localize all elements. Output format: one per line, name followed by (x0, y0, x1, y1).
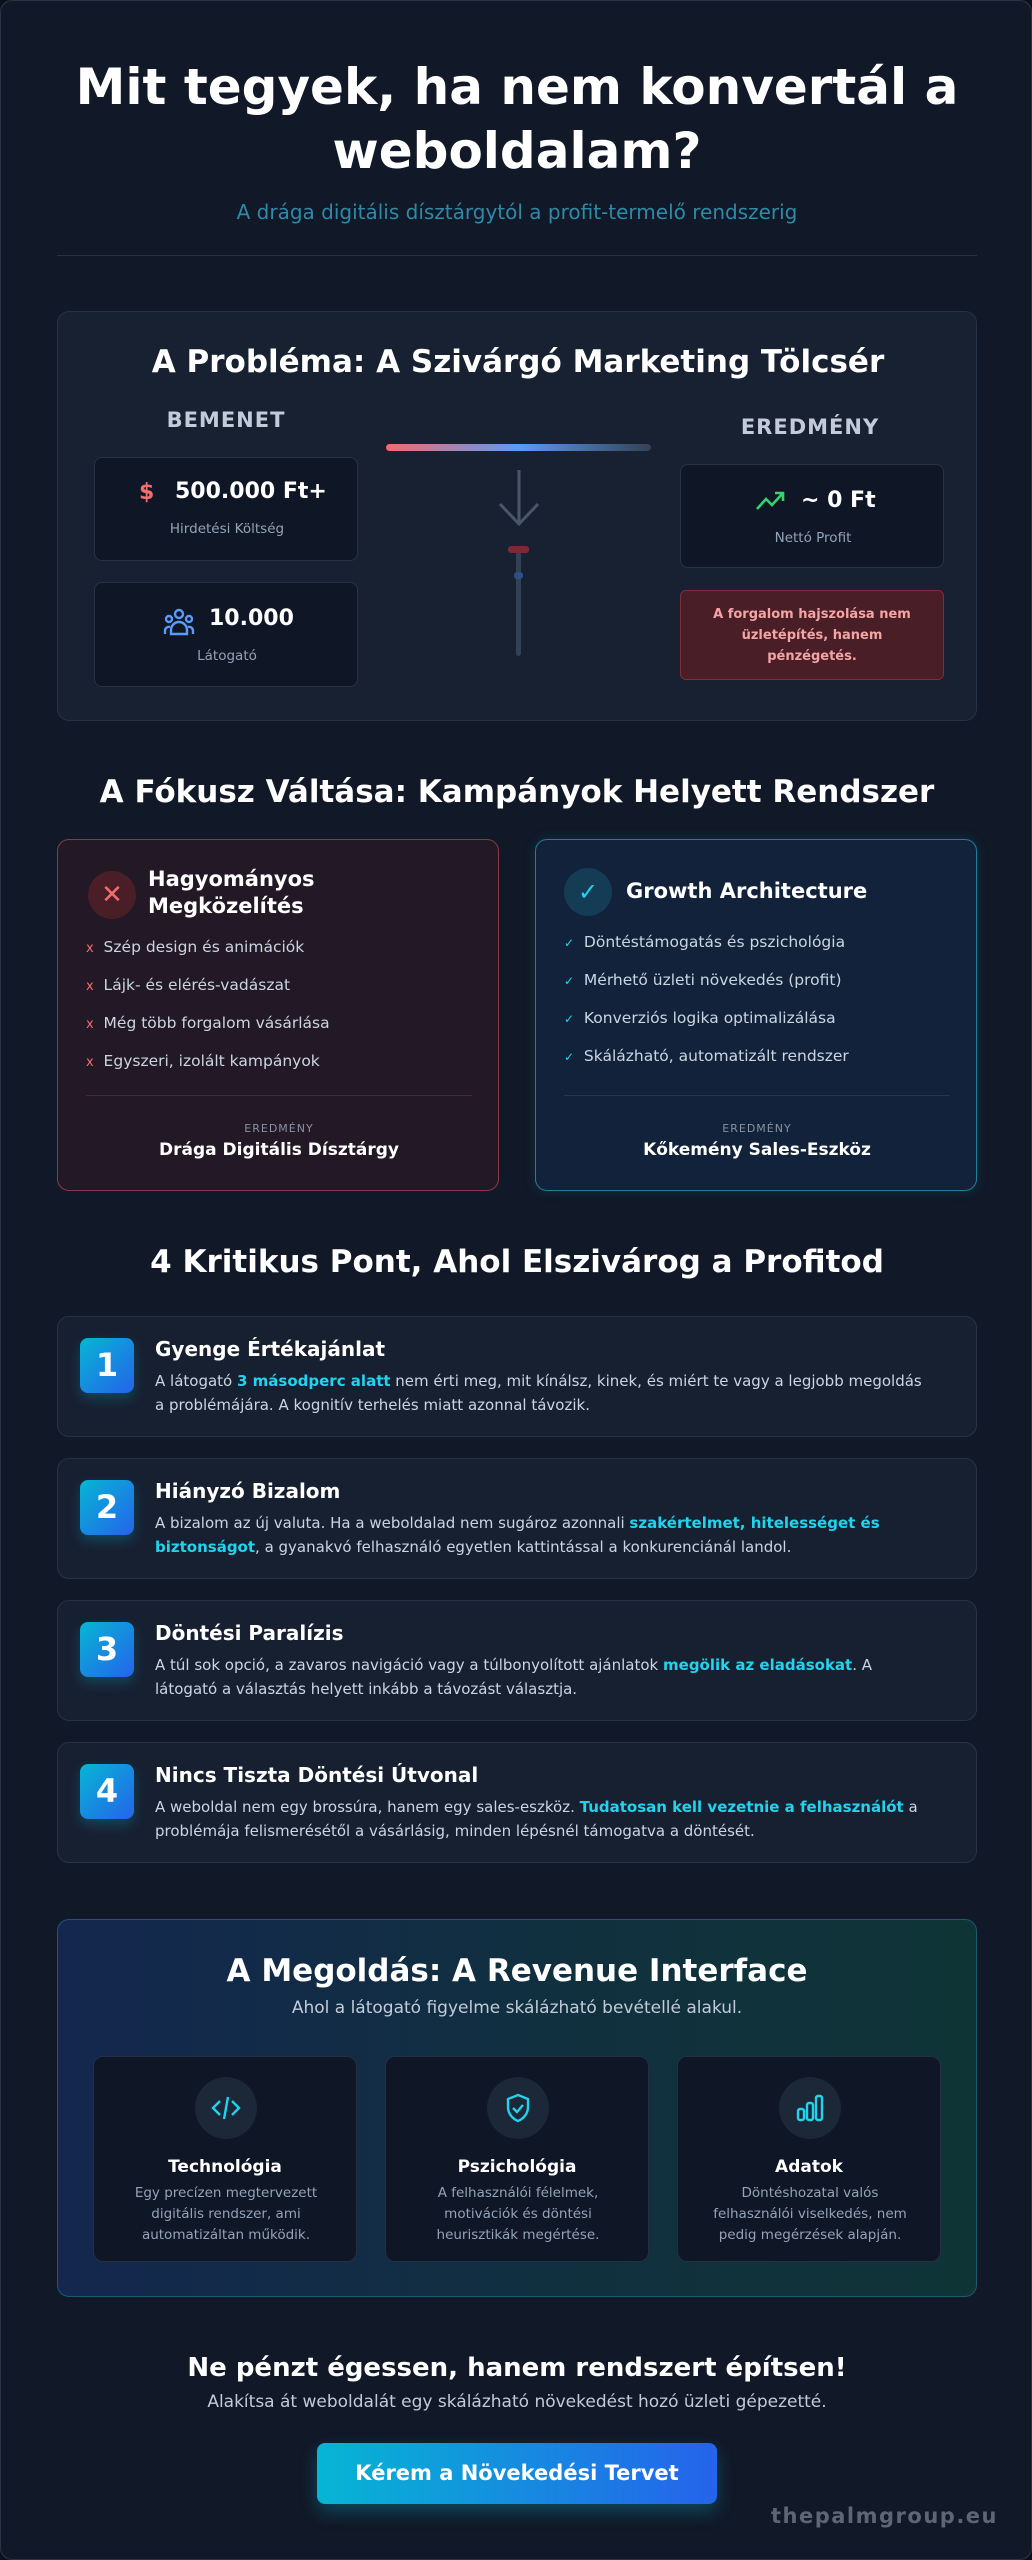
button (317, 2443, 717, 2504)
icon: shield (487, 2077, 549, 2139)
cta text: Alakítsa át weboldalát egy skálázható növekedést hozó üzleti gépezetté. (207, 2392, 827, 2412)
card: technology (93, 2056, 357, 2262)
subtitle: A drága digitális dísztárgytól a profit-termelő rendszerig (237, 200, 797, 224)
card: net profit (680, 464, 944, 568)
badge 1 (80, 1338, 134, 1393)
card: ad cost: 500.000 Ft+ (175, 479, 327, 504)
badge 2: 2 (96, 1488, 118, 1526)
icon: bar chart (779, 2077, 841, 2139)
point 3 (57, 1600, 977, 1721)
panel: traditional approach: Megközelítés (148, 894, 304, 918)
icon: users (164, 608, 194, 636)
badge 4: 4 (96, 1772, 118, 1810)
callout: warning (680, 590, 944, 680)
funnel leak graphic (386, 444, 651, 656)
card: visitors (94, 582, 358, 687)
watermark: thepalmgroup.eu (771, 2504, 998, 2528)
result: growth: Kőkemény Sales-Eszköz (643, 1140, 871, 1160)
heading: 4 critical points: 4 Kritikus Pont, Ahol Elszivárog a Profitod (150, 1244, 884, 1280)
icon: x (88, 871, 136, 919)
point 1: A látogató 3 másodperc alatt nem érti meg, mit kínálsz, kinek, és miért te vagy a legjobb megoldás (155, 1372, 922, 1390)
panel: traditional approach: x Szép design és animációk (86, 938, 304, 956)
panel: growth architecture: ✓ Konverziós logika optimalizálása (564, 1009, 836, 1027)
label: bemenet: BEMENET (167, 408, 285, 432)
panel: solution (57, 1919, 977, 2297)
badge 2 (80, 1480, 134, 1535)
callout: warning: üzletépítés, hanem (742, 628, 882, 643)
point 1 (57, 1316, 977, 1437)
panel: growth architecture (535, 839, 977, 1191)
icon: money: $ (139, 480, 154, 505)
panel: growth architecture: Growth Architecture (626, 879, 867, 903)
panel: growth architecture: ✓ Döntéstámogatás és pszichológia (564, 933, 845, 951)
panel: growth architecture: ✓ Skálázható, automatizált rendszer (564, 1047, 849, 1065)
icon: check: ✓ (578, 878, 598, 906)
cta heading: Ne pénzt égessen, hanem rendszert építsen! (187, 2353, 847, 2383)
callout: warning: A forgalom hajszolása nem (713, 607, 911, 622)
heading: problem: A Probléma: A Szivárgó Marketing Tölcsér (152, 344, 884, 380)
panel: traditional approach (57, 839, 499, 1191)
point 2 (57, 1458, 977, 1579)
card: technology: Technológia (168, 2157, 282, 2177)
icon: check (564, 868, 612, 916)
button: Kérem a Növekedési Tervet (355, 2461, 679, 2485)
icon: code (195, 2077, 257, 2139)
point 3: látogató a választás helyett inkább a távozást választja. (155, 1680, 577, 1698)
panel: growth architecture: EREDMÉNY (722, 1122, 792, 1135)
panel: traditional approach: EREDMÉNY (244, 1122, 314, 1135)
card: psychology (385, 2056, 649, 2262)
panel: traditional approach: x Még több forgalom vásárlása (86, 1014, 330, 1032)
card: data (677, 2056, 941, 2262)
point 1: Gyenge Értékajánlat (155, 1337, 385, 1361)
card: visitors: Látogató (197, 648, 257, 664)
badge 3: 3 (96, 1630, 118, 1668)
card: net profit: Nettó Profit (775, 530, 851, 546)
panel: traditional approach: Hagyományos (148, 867, 315, 891)
card: psychology: Pszichológia (458, 2157, 576, 2177)
panel: growth architecture: ✓ Mérhető üzleti növekedés (profit) (564, 971, 842, 989)
card: ad cost (94, 457, 358, 561)
heading: solution: A Megoldás: A Revenue Interface (227, 1953, 807, 1989)
point 3: A túl sok opció, a zavaros navigáció vagy a túlbonyolított ajánlatok megölik az eladásokat. A (155, 1656, 872, 1674)
label: eredmeny: EREDMÉNY (741, 415, 879, 439)
card: technology: Egy precízen megtervezett digitális rendszer, ami automatizáltan működik. (135, 2185, 317, 2243)
card: data: Döntéshozatal valós (742, 2185, 878, 2201)
card: ad cost: Hirdetési Költség (170, 521, 284, 537)
point 4 (57, 1742, 977, 1863)
badge 1: 1 (96, 1346, 118, 1384)
card: data: felhasználói viselkedés, nem pedig megérzések alapján. (713, 2206, 907, 2243)
subtitle: solution: Ahol a látogató figyelme skálázható bevétellé alakul. (292, 1998, 742, 2018)
panel: problem funnel (57, 311, 977, 721)
card: data: Adatok (775, 2157, 843, 2177)
point 1: a problémájára. A kognitív terhelés miatt azonnal távozik. (155, 1396, 590, 1414)
callout: warning: pénzégetés. (767, 649, 857, 664)
icon: trend (756, 492, 784, 510)
point 3: Döntési Paralízis (155, 1621, 344, 1645)
card: visitors: 10.000 (209, 606, 294, 631)
point 2: A bizalom az új valuta. Ha a weboldalad nem sugároz azonnali szakértelmet, hitelességet és (155, 1514, 880, 1532)
title: Mit tegyek, ha nem konvertál a weboldalam? (76, 58, 958, 180)
badge 4 (80, 1764, 134, 1819)
panel: traditional approach: x Lájk- és elérés-vadászat (86, 976, 290, 994)
result: traditional: Drága Digitális Dísztárgy (159, 1140, 399, 1160)
arrow down (499, 470, 539, 526)
point 4: A weboldal nem egy brossúra, hanem egy sales-eszköz. Tudatosan kell vezetnie a felhasználót a (155, 1798, 918, 1816)
badge 3 (80, 1622, 134, 1677)
card: net profit: ~ 0 Ft (801, 488, 876, 513)
point 2: Hiányzó Bizalom (155, 1479, 340, 1503)
icon: x: ✕ (101, 880, 123, 910)
panel: traditional approach: x Egyszeri, izolált kampányok (86, 1052, 320, 1070)
point 2: biztonságot, a gyanakvó felhasználó egyetlen kattintással a konkurenciánál landol. (155, 1538, 791, 1556)
heading: focus shift: A Fókusz Váltása: Kampányok Helyett Rendszer (100, 774, 934, 810)
point 4: problémája felismerésétől a vásárlásig, minden lépésnél támogatva a döntését. (155, 1822, 755, 1840)
card: psychology: A felhasználói félelmek, motivációk és döntési heurisztikák megértése. (437, 2185, 599, 2243)
point 4: Nincs Tiszta Döntési Útvonal (155, 1763, 478, 1787)
